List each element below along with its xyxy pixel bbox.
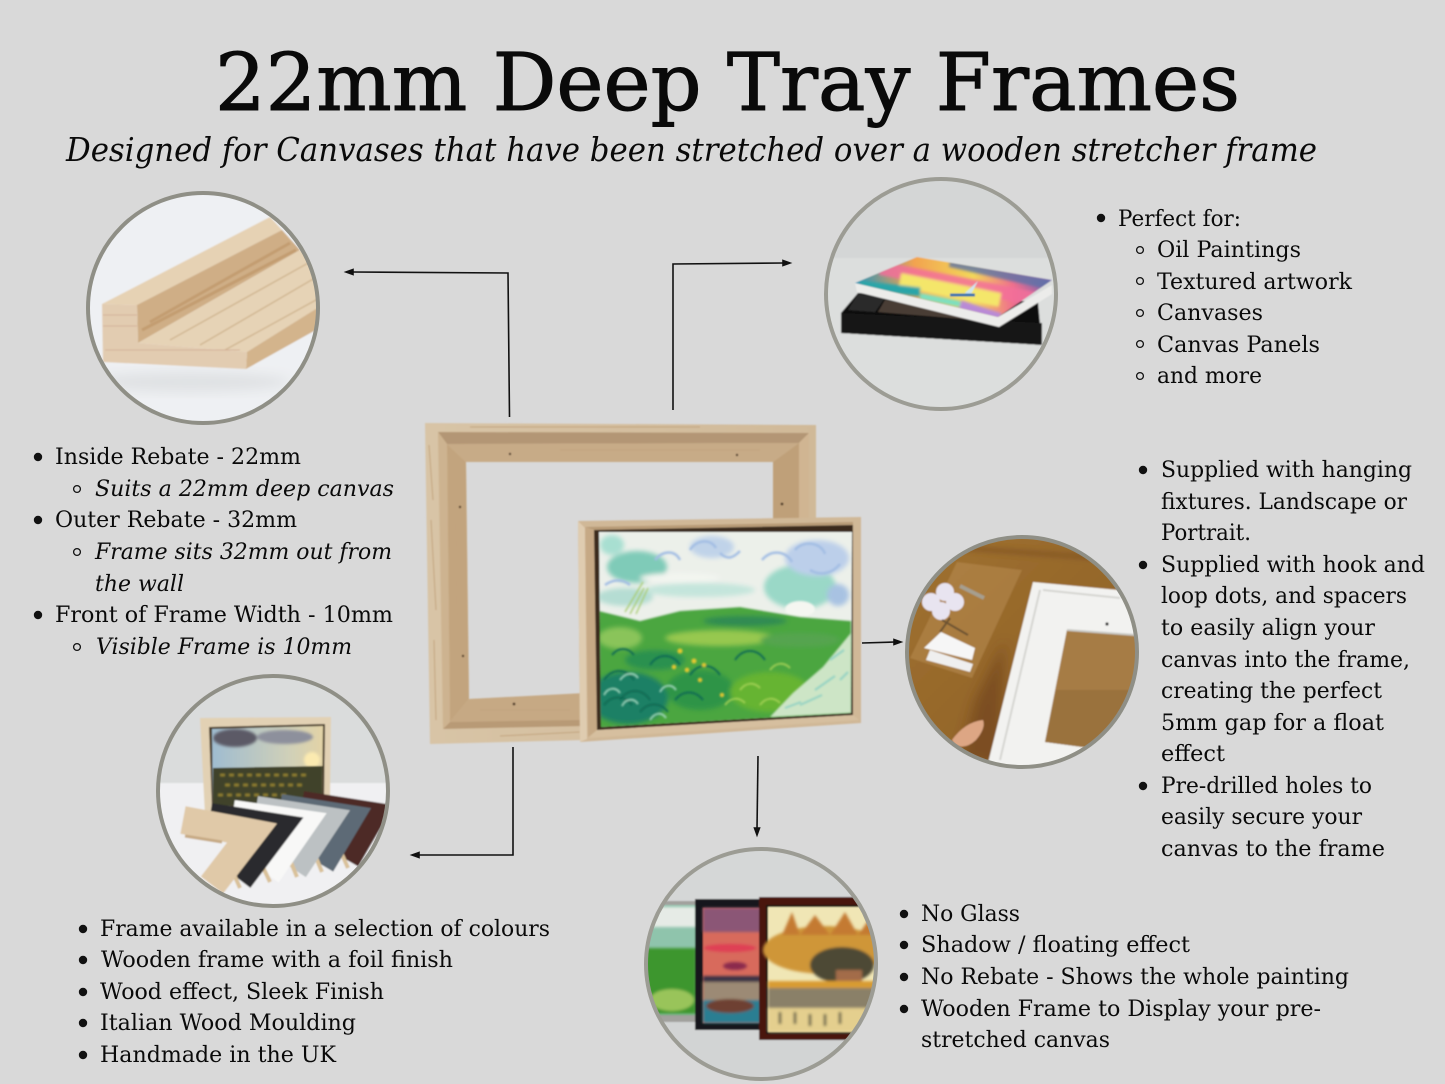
list: rebate specifications — [34, 445, 394, 660]
photo circle: frame colour samples — [150, 670, 400, 913]
list: perfect for: Oil Paintings — [1157, 238, 1301, 263]
arrow: to colour samples photo — [412, 747, 513, 858]
list: float effect: Shadow / floating effect — [921, 933, 1190, 958]
list: rebate specifications: Front of Frame Width - 10mm — [55, 603, 393, 628]
arrow: to moulding photo — [346, 270, 510, 417]
list: fixtures and fitting: Supplied with hanging — [1161, 458, 1412, 483]
photo circle: wood moulding profile — [86, 191, 320, 425]
list: frame finish: Italian Wood Moulding — [100, 1011, 356, 1036]
list: frame finish — [79, 917, 550, 1068]
list: float effect — [900, 902, 1349, 1053]
list: perfect for: Perfect for: — [1118, 207, 1241, 232]
list: perfect for — [1097, 207, 1353, 389]
list: perfect for: and more — [1157, 364, 1262, 389]
list: float effect: Wooden Frame to Display your pre- — [921, 997, 1321, 1022]
list: fixtures and fitting: canvas into the frame, — [1161, 648, 1410, 673]
list: float effect: No Glass — [921, 902, 1020, 927]
list: fixtures and fitting: fixtures. Landscape or — [1161, 490, 1407, 515]
list: fixtures and fitting: Portrait. — [1161, 521, 1251, 546]
list: fixtures and fitting: 5mm gap for a float — [1161, 711, 1384, 736]
list: fixtures and fitting: loop dots, and spacers — [1161, 584, 1407, 609]
list: fixtures and fitting: easily secure your — [1161, 805, 1362, 830]
list: rebate specifications: the wall — [95, 572, 184, 597]
list: perfect for: Canvas Panels — [1157, 333, 1320, 358]
photo circle: canvas above black tray frame — [820, 170, 1065, 418]
arrow: to canvas and tray photo — [673, 260, 790, 410]
list: rebate specifications: Outer Rebate - 32mm — [55, 508, 297, 533]
photo circle: three framed paintings — [640, 840, 887, 1084]
list: perfect for: Textured artwork — [1157, 270, 1353, 295]
list: fixtures and fitting: canvas to the frame — [1161, 837, 1385, 862]
subtitle: Designed for Canvases that have been stretched over a wooden stretcher frame — [65, 130, 1317, 169]
list: frame finish: Frame available in a selection of colours — [100, 917, 550, 942]
list: frame finish: Wooden frame with a foil finish — [101, 948, 453, 973]
back empty frame — [425, 423, 816, 744]
list: fixtures and fitting: creating the perfect — [1161, 679, 1382, 704]
list: float effect: No Rebate - Shows the whole painting — [921, 965, 1349, 990]
list: fixtures and fitting: Pre-drilled holes to — [1161, 774, 1372, 799]
list: rebate specifications: Suits a 22mm deep canvas — [95, 477, 394, 502]
front framed canvas — [578, 517, 861, 742]
list: fixtures and fitting: effect — [1161, 742, 1225, 767]
list: fixtures and fitting: to easily align your — [1161, 616, 1375, 641]
list: fixtures and fitting — [1139, 458, 1425, 862]
list: fixtures and fitting: Supplied with hook and — [1161, 553, 1425, 578]
list: rebate specifications: Visible Frame is 10mm — [96, 635, 352, 660]
list: rebate specifications: Inside Rebate - 22mm — [55, 445, 301, 470]
central product image: open frame and framed canvas — [425, 423, 861, 744]
list: float effect: stretched canvas — [921, 1028, 1110, 1053]
list: frame finish: Handmade in the UK — [100, 1043, 337, 1068]
list: frame finish: Wood effect, Sleek Finish — [100, 980, 384, 1005]
list: rebate specifications: Frame sits 32mm out from — [94, 540, 392, 565]
title: 22mm Deep Tray Frames — [215, 36, 1240, 129]
arrow: to framed paintings photo — [754, 756, 760, 835]
list: perfect for: Canvases — [1157, 301, 1263, 326]
photo circle: hanging fixtures and white frame — [905, 535, 1139, 769]
arrow: to fixtures photo — [862, 640, 901, 644]
